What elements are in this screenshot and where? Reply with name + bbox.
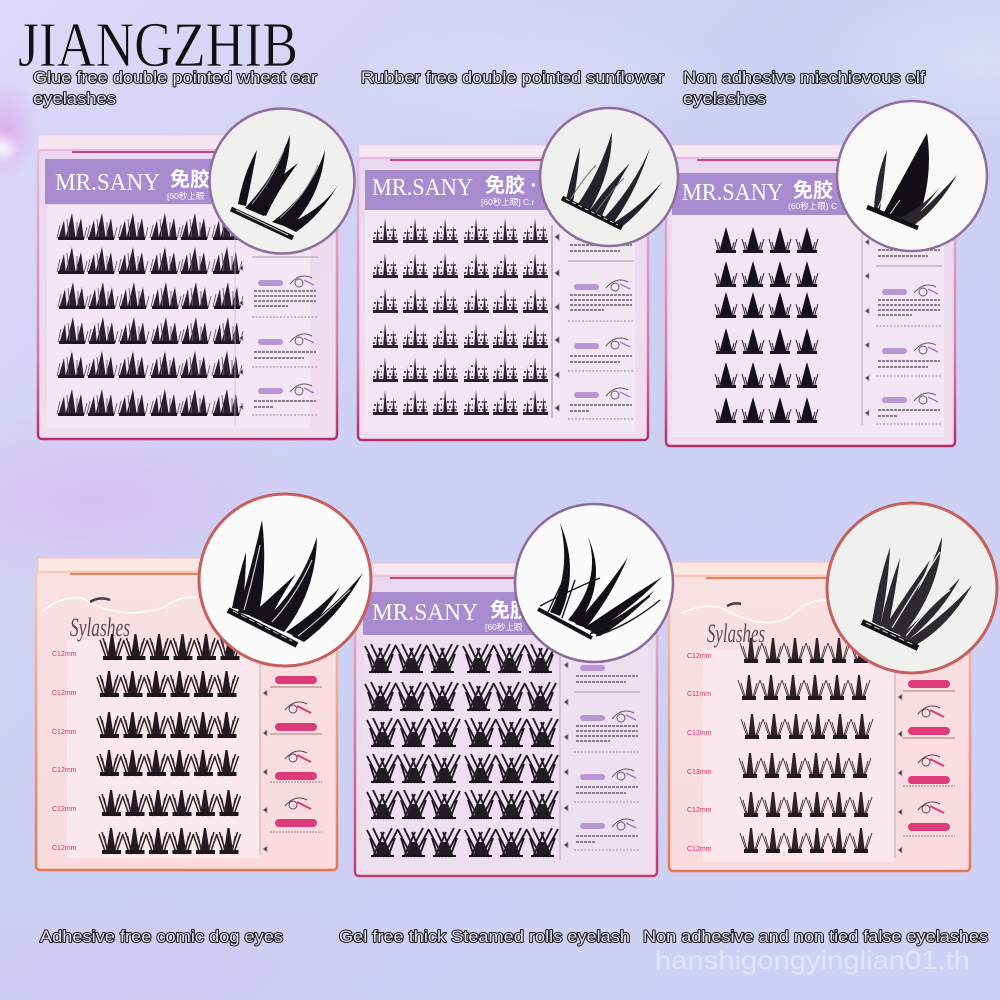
size labels [52, 651, 77, 852]
callout: comic dog eye lash close-up [199, 494, 371, 666]
size labels: C12mm [52, 806, 77, 813]
instruction column [252, 230, 318, 415]
label: product 5: Gel free thick Steamed rolls eyelash [339, 928, 630, 946]
arrows [560, 645, 568, 860]
header band: (60秒上眼) C [788, 201, 837, 211]
panel: product 3 lash tray [666, 145, 955, 446]
panel: product 4 lash tray [36, 558, 337, 870]
size labels: C12mm [52, 651, 77, 658]
size labels: C12mm [687, 653, 712, 660]
panel: product 1 lash tray [38, 135, 337, 439]
label: product 6: Non adhesive and non tied false eyelashes [643, 928, 988, 946]
instruction column [903, 680, 955, 836]
panel: product 5 lash tray [355, 563, 657, 876]
callout: sunflower lash close-up [540, 108, 678, 246]
label: product 1: eyelashes [33, 90, 116, 108]
script logo: Sylashes [707, 619, 765, 648]
callout: wheat ear lash close-up [210, 108, 354, 254]
header band: 免胶 [170, 167, 210, 191]
header band: MR.SANY [55, 170, 160, 196]
header band [672, 173, 944, 215]
instruction column [270, 676, 322, 832]
size labels: C12mm [687, 730, 712, 737]
arrows [862, 230, 869, 425]
size labels [687, 653, 712, 853]
watermark: hanshigongyinglian01.th [655, 945, 970, 975]
instruction column [574, 665, 640, 850]
size labels: C11mm [687, 691, 711, 698]
size labels: C12mm [52, 690, 77, 697]
label: product 3: eyelashes [683, 90, 766, 108]
size labels: C12mm [52, 729, 77, 736]
instruction column [876, 239, 942, 424]
size labels: C12mm [687, 846, 712, 853]
header band [365, 170, 640, 210]
size labels: C12mm [52, 845, 77, 852]
arrows [235, 205, 243, 425]
callout: untied false lash close-up [827, 503, 997, 673]
size labels: C12mm [687, 807, 712, 814]
label: product 3: Non adhesive mischievous elf [683, 69, 925, 87]
arrows [260, 645, 267, 855]
header band [363, 592, 648, 635]
header band: [60秒上眼] C.r [481, 197, 535, 207]
lash rows [365, 644, 558, 857]
lash rows [738, 638, 873, 853]
instruction column [568, 234, 634, 419]
header band [45, 159, 280, 204]
script logo [43, 597, 197, 642]
lash rows [97, 634, 242, 854]
size labels: C12mm [52, 767, 77, 774]
header band: MR.SANY [372, 175, 473, 201]
brand logo: JIANGZHIB [18, 10, 298, 80]
label: product 3 [683, 69, 925, 108]
header band: MR.SANY [372, 600, 478, 626]
label: product 1 [33, 69, 318, 108]
script logo [682, 600, 827, 648]
label: product 2: Rubber free double pointed sunflower [361, 69, 665, 87]
lash rows [373, 218, 548, 415]
header band: [60秒上眼 [167, 191, 205, 201]
arrows [895, 660, 902, 858]
header band: 免胶 · 免 [485, 173, 563, 197]
header band: [60秒上眼 [485, 622, 523, 632]
callout: elf lash close-up [837, 101, 987, 251]
panel: product 6 lash tray [669, 562, 970, 871]
script logo: Sylashes [70, 613, 130, 642]
header band: 免胶 [490, 598, 530, 622]
label: product 1: Glue free double pointed wheat ear [33, 69, 318, 87]
size labels: C13mm [687, 769, 712, 776]
header band: MR.SANY [682, 180, 783, 206]
header band: 免胶 · [793, 178, 845, 202]
lash rows [57, 213, 243, 416]
lash rows [715, 227, 818, 423]
label: product 4: Adhesive free comic dog eyes [40, 928, 283, 946]
panel: product 2 lash tray [358, 145, 648, 440]
callout: steamed roll lash close-up [515, 504, 673, 662]
arrows [552, 225, 559, 418]
